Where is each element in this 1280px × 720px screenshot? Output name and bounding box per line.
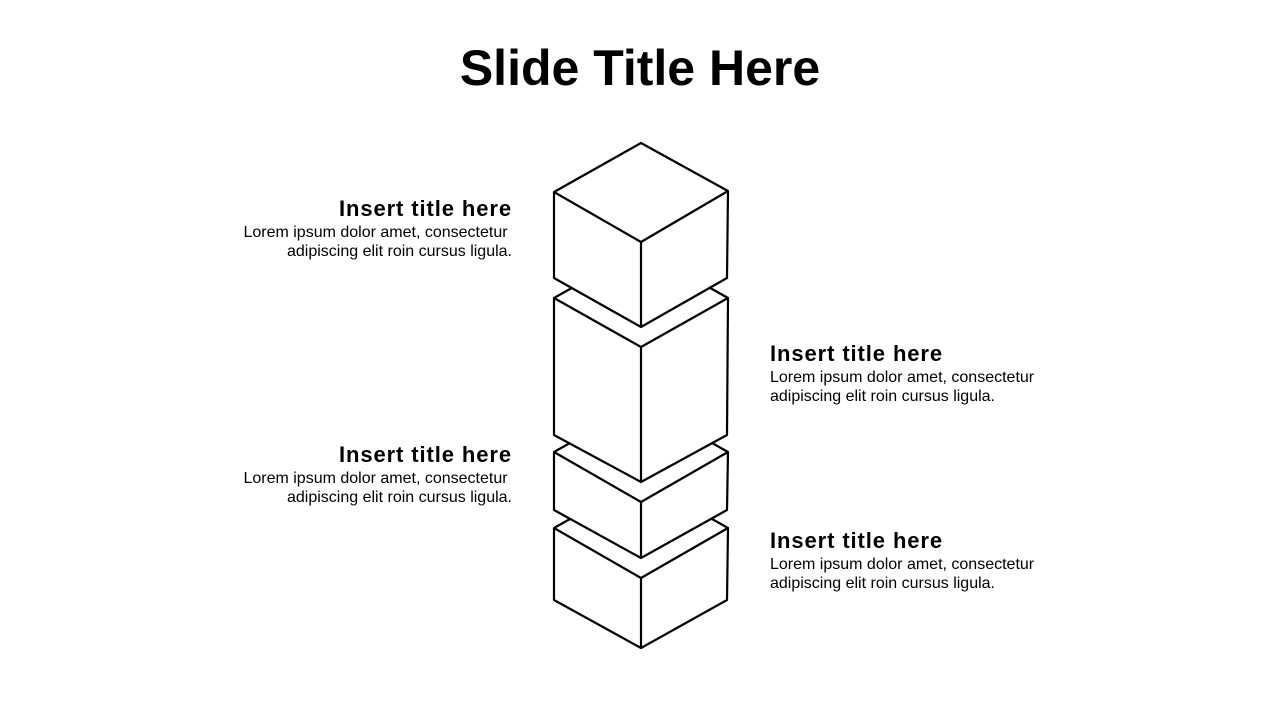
text block 1: Lorem ipsum dolor amet, consectetur (243, 224, 508, 241)
block 4 bottom (554, 479, 728, 648)
text block 4: adipiscing elit roin cursus ligula. (770, 575, 995, 592)
block 3 (554, 403, 728, 558)
text block 1: Insert title here (339, 196, 512, 221)
text block 3: Lorem ipsum dolor amet, consectetur (243, 470, 508, 487)
text block 2: Insert title here (770, 341, 943, 366)
block 2 tall (554, 249, 728, 482)
text block 4: Lorem ipsum dolor amet, consectetur (770, 556, 1034, 573)
text block 2 (770, 341, 1034, 405)
text block 2: Lorem ipsum dolor amet, consectetur (770, 369, 1034, 386)
text block 3: adipiscing elit roin cursus ligula. (287, 489, 512, 506)
text block 1 (243, 196, 512, 260)
text block 4 (770, 528, 1034, 592)
text block 3 (243, 442, 512, 506)
text block 2: adipiscing elit roin cursus ligula. (770, 388, 995, 405)
text block 1: adipiscing elit roin cursus ligula. (287, 243, 512, 260)
text block 3: Insert title here (339, 442, 512, 467)
block 1 top cube (554, 143, 728, 327)
text block 4: Insert title here (770, 528, 943, 553)
title: Slide Title Here (460, 40, 820, 96)
